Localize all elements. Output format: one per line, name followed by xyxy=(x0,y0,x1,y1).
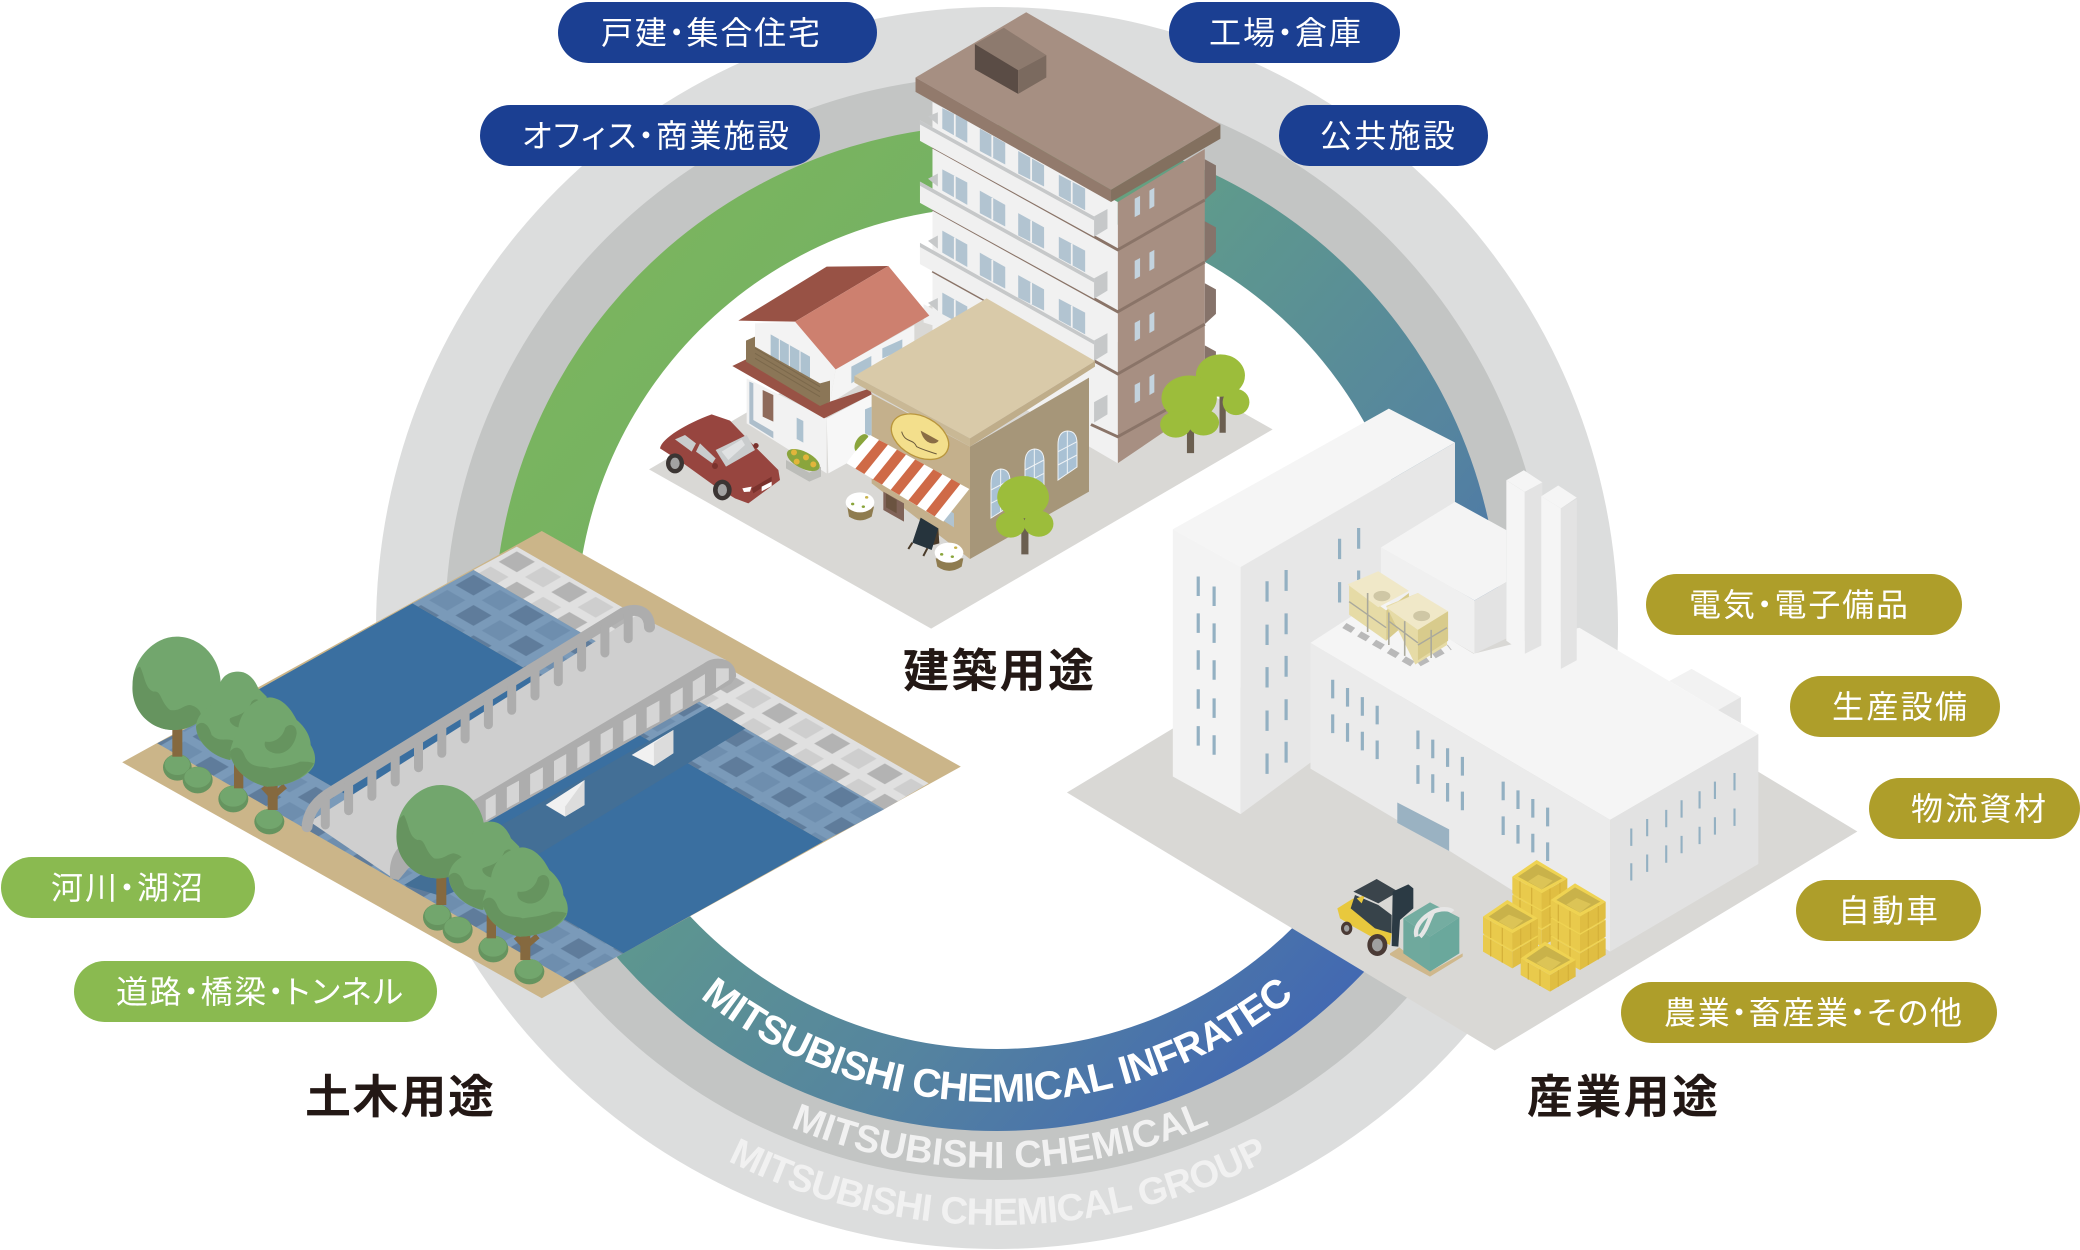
middle ring: Mitsubishi Chemical xyxy=(445,76,1549,1180)
heading: building use: 建築用途 xyxy=(903,645,1094,697)
stacked yellow crates xyxy=(1483,860,1606,992)
riverside tree far back xyxy=(132,637,221,757)
red car xyxy=(660,414,780,503)
pill: automobiles: 自動車 xyxy=(1838,893,1938,929)
pill: automobiles xyxy=(1796,880,1981,941)
factory mid block xyxy=(1381,502,1506,654)
bridge piers xyxy=(546,730,673,817)
riverside shrubs near xyxy=(423,904,544,984)
sand embankment xyxy=(122,531,961,998)
riverside trees near front xyxy=(449,822,568,960)
shop building xyxy=(847,298,1095,559)
pill: roads, bridges and tunnels xyxy=(74,961,437,1022)
pill: rivers and lakes xyxy=(1,857,255,918)
pill: offices and commercial facilities xyxy=(480,105,820,166)
shop roof xyxy=(854,298,1095,438)
pill: agriculture, livestock and others: 農業・畜産業・その他 xyxy=(1664,995,1962,1031)
pill: offices and commercial facilities: オフィス・商業施設 xyxy=(522,118,789,154)
twin chimneys xyxy=(1506,470,1577,669)
pill: factories and warehouses xyxy=(1169,2,1400,63)
heading: industrial use: 産業用途 xyxy=(1527,1071,1718,1123)
pill: logistics materials: 物流資材 xyxy=(1911,791,2046,827)
far railing xyxy=(307,610,650,827)
curved label: Mitsubishi Chemical Group: MITSUBISHI CHEMICAL GROUP xyxy=(730,1138,1262,1225)
inner ring: Mitsubishi Chemical Infratec xyxy=(494,125,1500,1131)
riverside shrubs far xyxy=(163,754,284,834)
paved revetment far side xyxy=(474,547,929,809)
apartment tower xyxy=(916,12,1220,463)
panel: industrial use illustration xyxy=(1067,409,1857,1051)
blue revetment far side xyxy=(412,570,884,842)
pill: electrical and electronic equipment xyxy=(1646,574,1962,635)
forklift xyxy=(1337,879,1463,977)
blue revetment near side xyxy=(157,717,623,982)
pill: detached and multi-unit housing xyxy=(558,2,877,63)
factory main hall xyxy=(1310,597,1758,952)
flower planter xyxy=(784,444,823,482)
pill: production equipment: 生産設備 xyxy=(1832,689,1967,725)
pill: electrical and electronic equipment: 電気・電子備品 xyxy=(1689,587,1908,623)
tower right wall xyxy=(1118,149,1205,463)
pill: public facilities: 公共施設 xyxy=(1320,118,1455,154)
riverside trees far front xyxy=(196,672,315,810)
panel: civil engineering use illustration xyxy=(122,531,961,998)
building plaza xyxy=(649,270,1273,629)
near railing xyxy=(390,659,736,880)
pill: logistics materials xyxy=(1869,778,2080,839)
factory door xyxy=(1397,802,1449,851)
river water xyxy=(210,603,823,953)
teal bulk bag xyxy=(1403,902,1459,937)
pill: factories and warehouses: 工場・倉庫 xyxy=(1209,15,1361,51)
shop sign xyxy=(884,405,956,469)
flower basket right xyxy=(935,543,963,571)
heading: civil engineering use: 土木用途 xyxy=(305,1071,494,1123)
pill: rivers and lakes: 河川・湖沼 xyxy=(51,870,203,906)
flower basket left xyxy=(846,492,874,520)
tower left facade xyxy=(932,102,1118,463)
bridge shadow on water xyxy=(404,707,745,897)
curved label: Mitsubishi Chemical: MITSUBISHI CHEMICAL xyxy=(792,1104,1209,1168)
pill: roads, bridges and tunnels: 道路・橋梁・トンネル xyxy=(116,974,403,1010)
outer ring: Mitsubishi Chemical Group xyxy=(376,7,1618,1249)
rooftop water tanks xyxy=(1344,571,1450,665)
tree front of shop xyxy=(996,476,1053,554)
striped awning xyxy=(847,435,969,522)
factory left tower xyxy=(1173,409,1455,814)
pill: production equipment xyxy=(1790,676,2000,737)
arched shop windows xyxy=(991,431,1077,518)
pill: detached and multi-unit housing: 戸建・集合住宅 xyxy=(601,15,820,51)
pill: agriculture, livestock and others xyxy=(1621,982,1997,1043)
inner white disc xyxy=(576,207,1418,1049)
riverside tree near back xyxy=(396,785,485,905)
panel: building use illustration xyxy=(649,12,1273,629)
bridge deck xyxy=(310,615,726,878)
detached house xyxy=(732,266,929,473)
curved label: Mitsubishi Chemical Infratec: MITSUBISHI CHEMICAL INFRATEC xyxy=(702,977,1290,1102)
tree behind shop xyxy=(1160,354,1249,453)
house roof xyxy=(738,266,888,322)
factory plaza xyxy=(1067,573,1857,1051)
tower roof xyxy=(916,12,1220,190)
concentric group rings xyxy=(376,7,1618,1249)
menu blackboard xyxy=(908,518,939,556)
rooftop equipment box xyxy=(975,28,1046,70)
pill: public facilities xyxy=(1279,105,1488,166)
